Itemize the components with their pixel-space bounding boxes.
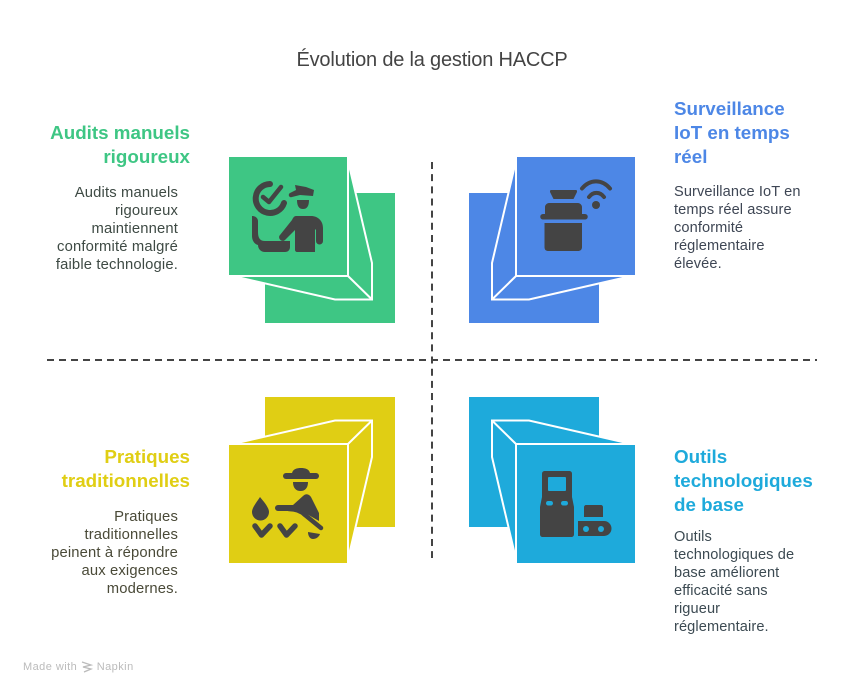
text: surveillance: Surveillance IoT en (674, 184, 801, 200)
heading: outils: de base (674, 494, 744, 515)
text: audits: maintiennent (91, 221, 178, 237)
text: audits: Audits manuels (75, 185, 178, 201)
heading: surveillance: IoT en temps (674, 122, 790, 143)
logo: Napkin mark (82, 662, 91, 672)
heading: outils: technologiques (674, 470, 813, 491)
icon: kiosk and conveyor (540, 471, 612, 537)
icon block: yellow cube (229, 397, 395, 563)
title: Évolution de la gestion HACCP (296, 49, 568, 71)
text: outils: réglementaire. (674, 619, 769, 635)
icon block: green cube (229, 157, 395, 323)
text: audits: conformité malgré (57, 239, 178, 255)
text: audits: rigoureux (115, 203, 178, 219)
text: surveillance (674, 184, 801, 272)
heading: surveillance (674, 98, 790, 167)
text: outils: rigueur (674, 601, 720, 617)
heading: surveillance: réel (674, 146, 707, 167)
axis: horizontal and vertical dashed lines (47, 162, 817, 558)
heading: audits: Audits manuels (50, 122, 190, 143)
text: pratiques (51, 509, 178, 597)
icon: inspector with checklist (252, 184, 323, 252)
heading: pratiques: traditionnelles (62, 470, 190, 491)
footer: made with Napkin: Made with Napkin (23, 661, 134, 673)
text: surveillance: conformité (674, 220, 743, 236)
text: surveillance: temps réel assure (674, 202, 792, 218)
heading: surveillance: Surveillance (674, 98, 785, 119)
text: surveillance: élevée. (674, 256, 722, 272)
text: pratiques: modernes. (107, 581, 178, 597)
text: outils: technologiques de (674, 547, 794, 563)
icon: IoT sensor with wifi (540, 181, 610, 251)
text: outils: base améliorent (674, 565, 779, 581)
text: audits (56, 185, 178, 273)
text: pratiques: aux exigences (81, 563, 178, 579)
heading: outils: Outils (674, 446, 727, 467)
text: outils (674, 529, 794, 635)
heading: audits (50, 122, 190, 167)
text: pratiques: peinent à répondre (51, 545, 178, 561)
text: surveillance: réglementaire (674, 238, 765, 254)
text: outils: Outils (674, 529, 712, 545)
text: pratiques: traditionnelles (84, 527, 178, 543)
text: outils: efficacité sans (674, 583, 768, 599)
heading: outils (674, 446, 813, 515)
heading: pratiques (62, 446, 190, 491)
heading: audits: rigoureux (103, 146, 190, 167)
icon block: blue cube (469, 157, 635, 323)
text: audits: faible technologie. (56, 257, 178, 273)
icon: farmer watering crops (252, 468, 321, 539)
icon block: cyan cube (469, 397, 635, 563)
text: pratiques: Pratiques (114, 509, 178, 525)
heading: pratiques: Pratiques (104, 446, 190, 467)
